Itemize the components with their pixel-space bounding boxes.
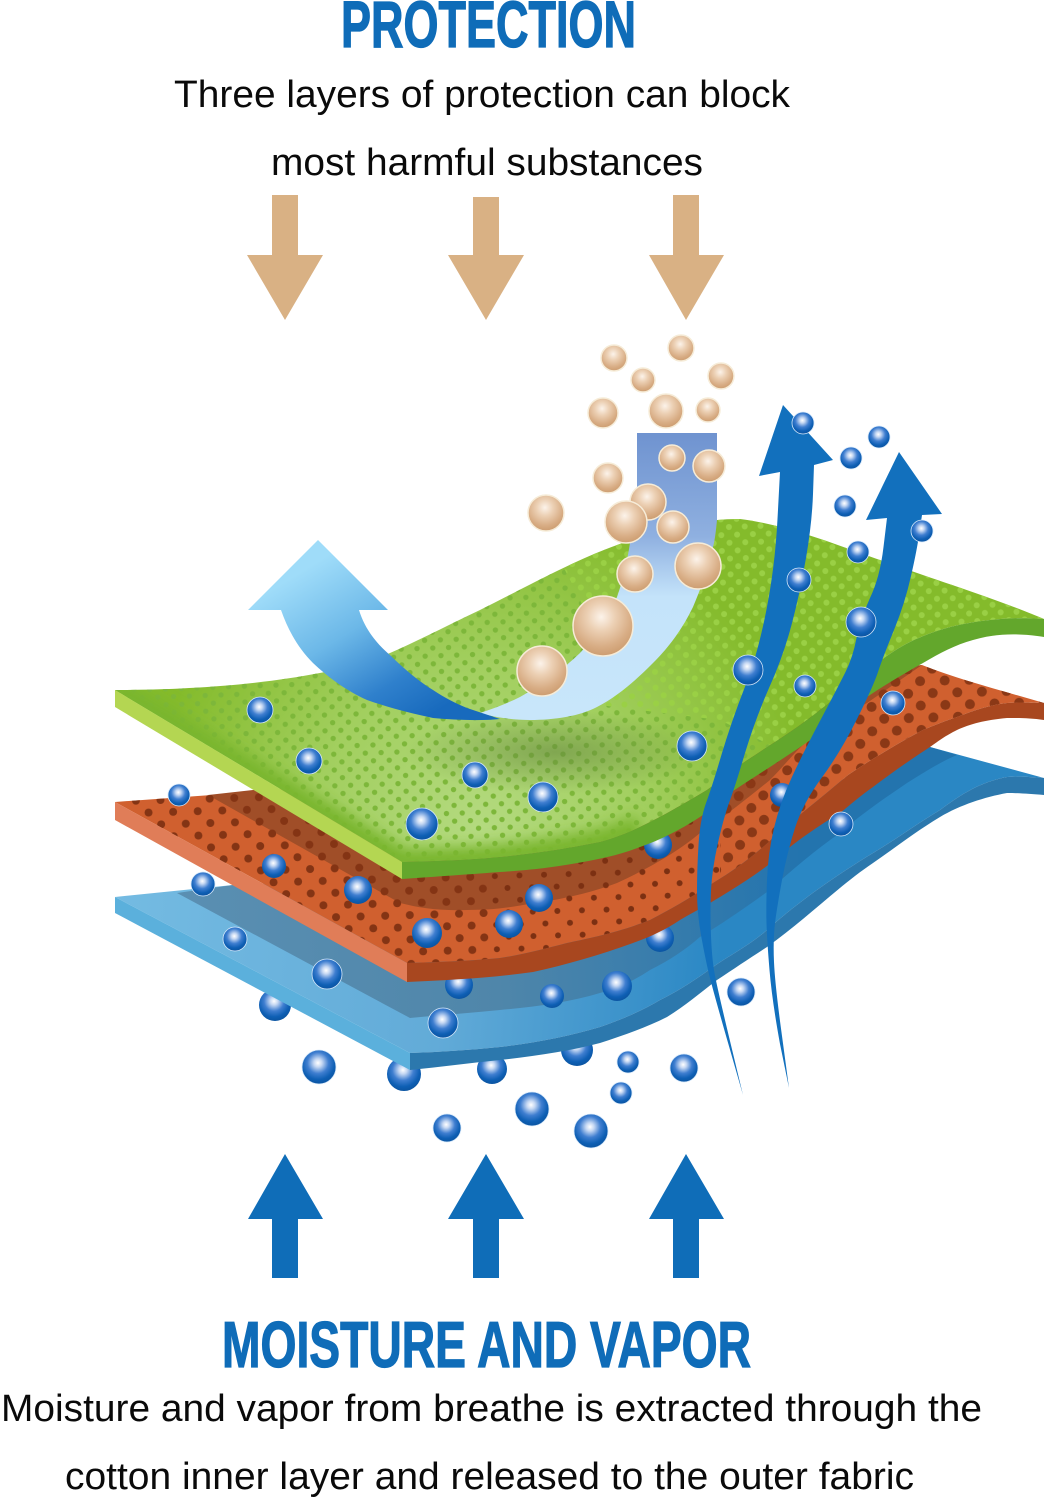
text: protection description — [174, 74, 791, 184]
title: moisture and vapor: MOISTURE AND VAPOR — [222, 1308, 751, 1381]
balls between blue and red layers — [445, 924, 674, 1008]
particles: tan substances — [517, 335, 734, 696]
layer: blue inner fabric — [115, 747, 1044, 1070]
layer: green outer fabric — [100, 490, 1044, 880]
balls behind the blue layer — [259, 989, 593, 1091]
arrows: blue upward — [248, 1154, 724, 1278]
arrows: tan downward — [247, 195, 724, 320]
text: moisture description — [1, 1388, 982, 1498]
text: protection description: most harmful substances — [271, 142, 703, 184]
text: protection description: Three layers of protection can block — [174, 74, 791, 116]
text: moisture description: Moisture and vapor from breathe is extracted through the — [1, 1388, 982, 1430]
layer: red middle fabric — [100, 660, 1044, 982]
particles: blue moisture — [168, 412, 933, 1148]
balls between red and green layers — [262, 831, 672, 948]
arrows: curved blue moisture — [697, 405, 942, 1095]
ball under curved arrows — [770, 783, 794, 807]
swoosh: deflected blue arrow — [248, 433, 717, 720]
text: moisture description: cotton inner layer and released to the outer fabric — [65, 1456, 914, 1498]
